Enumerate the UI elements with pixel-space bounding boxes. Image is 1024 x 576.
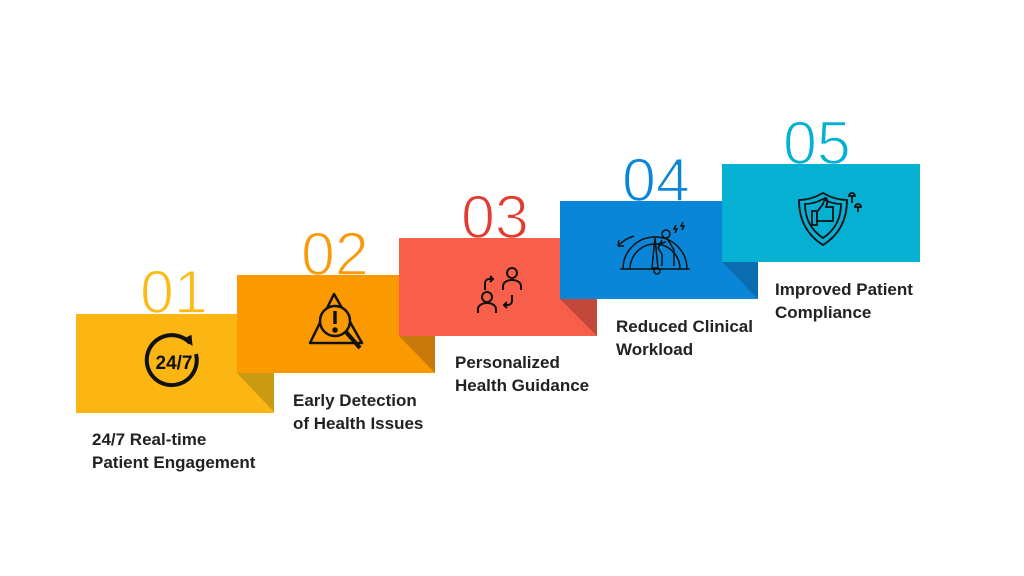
box 1 (76, 314, 274, 413)
icon: 24/7 (147, 335, 197, 385)
box 4 (560, 201, 758, 299)
number 03: 03 (461, 183, 529, 251)
icon: warning magnifier (310, 294, 362, 348)
step 5 (722, 109, 920, 299)
icon: overload gauge (618, 222, 690, 274)
number 02: 02 (301, 220, 369, 288)
label 2: of Health Issues (293, 414, 423, 433)
label 5 (775, 280, 913, 322)
label 3: Health Guidance (455, 376, 589, 395)
icon: shield thumbs up (799, 193, 861, 245)
label 4 (616, 317, 753, 359)
box 5 (722, 164, 920, 262)
label 2 (293, 391, 423, 433)
step 2 (237, 220, 435, 412)
step 4 (560, 146, 758, 336)
icon: 24/7: 24/7 (156, 353, 192, 374)
icon: people exchange (478, 268, 521, 313)
fold 3 (560, 299, 597, 336)
label 4: Reduced Clinical (616, 317, 753, 336)
label 1 (92, 430, 256, 472)
box 3 (399, 238, 597, 336)
label 5: Compliance (775, 303, 871, 322)
label 5: Improved Patient (775, 280, 913, 299)
fold 2 (399, 336, 435, 373)
number 01: 01 (140, 258, 208, 326)
fold 1 (237, 373, 274, 412)
label 2: Early Detection (293, 391, 417, 410)
label 3: Personalized (455, 353, 560, 372)
step 1 (76, 258, 274, 413)
label 1: Patient Engagement (92, 453, 255, 472)
box 2 (237, 275, 435, 373)
step 3 (399, 183, 597, 373)
label 3 (455, 353, 589, 395)
number 04: 04 (622, 146, 690, 214)
fold 4 (722, 262, 758, 299)
label 1: 24/7 Real-time (92, 430, 206, 449)
number 05: 05 (783, 109, 851, 177)
label 4: Workload (616, 340, 693, 359)
